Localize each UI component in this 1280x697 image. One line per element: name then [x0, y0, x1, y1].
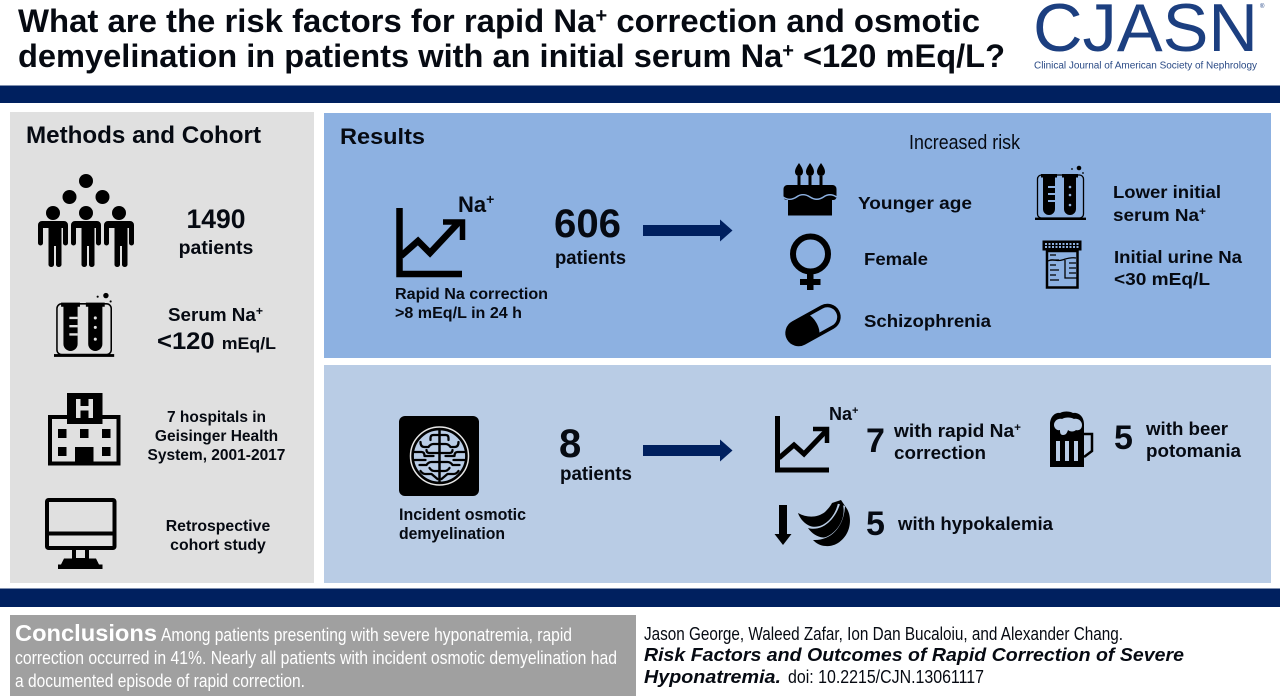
icon: rising sodium chart small: Na [829, 404, 852, 424]
rapid correction definition: Rapid Na correction [395, 286, 548, 303]
patients count [179, 204, 254, 259]
icon: birthday cake [783, 163, 836, 216]
panel: conclusions: Among patients presenting with severe hyponatremia, rapid [161, 625, 572, 645]
demyelination count [559, 422, 632, 485]
beer potomania finding: potomania [1146, 441, 1242, 461]
citation: Hyponatremia. [644, 666, 781, 687]
icon: rising sodium chart [400, 191, 494, 274]
hypokalemia finding [866, 505, 1054, 543]
icon: urine cup [1042, 240, 1082, 288]
icon: beer mug [1050, 412, 1092, 467]
patients count: 1490 [187, 204, 245, 234]
icon: rising sodium chart: Na [458, 192, 486, 217]
rapid correction finding: correction [894, 443, 986, 463]
icon: test tubes [54, 293, 114, 357]
title: demyelination in patients with an initial serum Na [18, 38, 780, 74]
hospitals text: System, 2001-2017 [148, 447, 285, 464]
icon: computer monitor [47, 500, 114, 569]
demyelination count: 8 [559, 422, 581, 466]
rapid correction definition: >8 mEq/L in 24 h [395, 305, 522, 322]
icon: female symbol [793, 236, 828, 290]
hospitals text: Geisinger Health [155, 428, 278, 445]
demyelination label: Incident osmotic [399, 506, 526, 524]
beer potomania finding [1114, 419, 1242, 461]
title: <120 mEq/L? [794, 38, 1005, 74]
lower serum sodium label: serum Na [1113, 205, 1193, 225]
icon: pill capsule [781, 300, 844, 350]
demyelination count: patients [560, 464, 632, 485]
rapid correction count: patients [555, 248, 626, 269]
hospitals text: 7 hospitals in [167, 409, 266, 426]
urine sodium label [1114, 247, 1242, 289]
serum sodium threshold: + [256, 304, 263, 318]
results heading: Results [340, 124, 425, 149]
lower serum sodium label: + [1199, 206, 1206, 218]
serum sodium threshold: <120 mEq/L [157, 328, 276, 355]
demyelination label: demyelination [399, 525, 505, 543]
panel: conclusions: a documented episode of rapid correction. [15, 671, 305, 691]
panel: osmotic demyelination [324, 365, 1271, 583]
title: + [782, 40, 794, 62]
patients count: patients [179, 237, 254, 259]
rapid correction finding: + [1014, 422, 1021, 434]
panel: conclusions: correction occurred in 41%. Nearly all patients with incident osmotic demyelination had [15, 648, 617, 668]
icon: test tubes small [1035, 166, 1086, 220]
hospitals text [148, 409, 285, 464]
serum sodium threshold: Serum Na [168, 304, 254, 325]
rapid correction definition [395, 286, 548, 322]
rapid correction finding: with rapid Na [894, 421, 1007, 441]
icon: down arrow and bananas [774, 500, 850, 546]
increased risk heading: Increased risk [909, 132, 1021, 154]
schizophrenia label: Schizophrenia [864, 311, 991, 331]
lower serum sodium label [1113, 182, 1221, 225]
icon: rising sodium chart small [778, 404, 858, 470]
panel: conclusions [10, 615, 636, 696]
icon: rising sodium chart small: + [852, 405, 858, 417]
title [18, 3, 1005, 74]
methods heading: Methods and Cohort [26, 122, 261, 149]
panel: conclusions: Conclusions [15, 620, 157, 646]
citation [644, 624, 1184, 687]
title: correction and osmotic [607, 3, 980, 39]
hypokalemia finding: 5 [866, 505, 885, 543]
study design text: cohort study [170, 537, 266, 554]
panel: results [324, 113, 1271, 358]
rapid correction finding: 7 [866, 422, 885, 460]
female label: Female [864, 249, 928, 269]
citation: doi: 10.2215/CJN.13061117 [788, 667, 984, 687]
arrow: to risk factors [643, 220, 732, 242]
hypokalemia finding: with hypokalemia [897, 514, 1054, 534]
icon: rising sodium chart: + [486, 191, 494, 207]
lower serum sodium label: Lower initial [1113, 182, 1221, 202]
icon: hospital [50, 393, 118, 465]
serum sodium threshold [157, 304, 276, 355]
citation: Jason George, Waleed Zafar, Ion Dan Bucaloiu, and Alexander Chang. [644, 624, 1123, 644]
rapid correction finding [866, 421, 1021, 463]
icon: brain scan [399, 416, 479, 496]
beer potomania finding: 5 [1114, 419, 1133, 457]
title: + [595, 5, 607, 27]
icon: group of people [38, 174, 134, 267]
demyelination label [399, 506, 526, 543]
arrow: to associated factors [643, 440, 732, 462]
panel: methods and cohort [10, 112, 314, 583]
CJASN logo: Clinical Journal of American Society of Nephrology [1034, 60, 1257, 72]
urine sodium label: <30 mEq/L [1114, 269, 1210, 289]
study design text: Retrospective [166, 518, 270, 535]
beer potomania finding: with beer [1145, 419, 1228, 439]
rapid correction count [554, 202, 626, 269]
citation: Risk Factors and Outcomes of Rapid Correction of Severe [644, 644, 1184, 665]
rapid correction count: 606 [554, 202, 621, 246]
CJASN logo: ® [1260, 3, 1265, 10]
urine sodium label: Initial urine Na [1114, 247, 1242, 267]
study design text [166, 518, 270, 554]
younger age label: Younger age [858, 193, 972, 213]
title: What are the risk factors for rapid Na [18, 3, 589, 39]
